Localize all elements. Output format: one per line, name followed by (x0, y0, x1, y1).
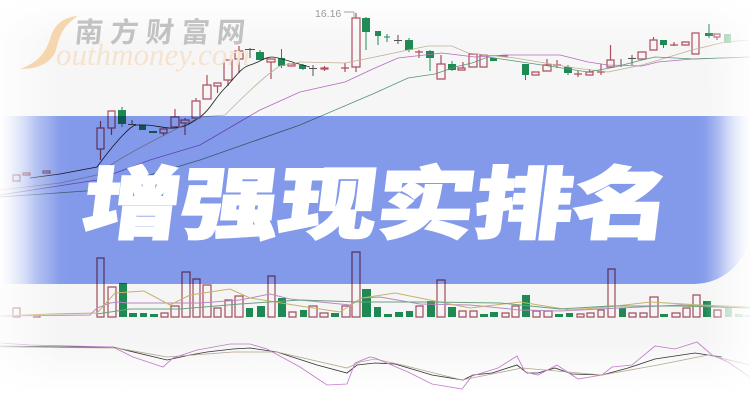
falling volume bars (119, 283, 711, 317)
blue title band (0, 116, 750, 284)
high price label (315, 8, 354, 20)
candlestick chart (13, 13, 730, 181)
MA line green (0, 57, 750, 197)
DIF line (0, 346, 722, 380)
high price label: 16.16 (315, 8, 341, 20)
logo Chinese name: 南方财富网 (73, 16, 254, 48)
MA line beige (0, 40, 750, 190)
edge fade left (0, 0, 60, 400)
volume lines (0, 294, 750, 316)
faded volume bars (725, 307, 750, 317)
logo domain name: outhmoney.com (56, 37, 250, 72)
logo: Southmoney (20, 16, 254, 72)
icon: logo swoosh (20, 16, 78, 69)
edge fade right (705, 0, 750, 400)
title: 增强现实排名 (78, 161, 677, 249)
dark cross candles (128, 35, 636, 125)
rising volume bars (13, 252, 721, 317)
volume bars (0, 252, 750, 317)
MA line black (30, 57, 310, 178)
moving averages (0, 40, 750, 197)
MA line pink (0, 53, 750, 195)
DEA line (0, 347, 750, 380)
oscillator lines (0, 342, 750, 389)
rising candles (13, 13, 720, 181)
faded last candle (724, 34, 730, 42)
MACD line (0, 342, 750, 389)
falling candles (118, 17, 712, 132)
